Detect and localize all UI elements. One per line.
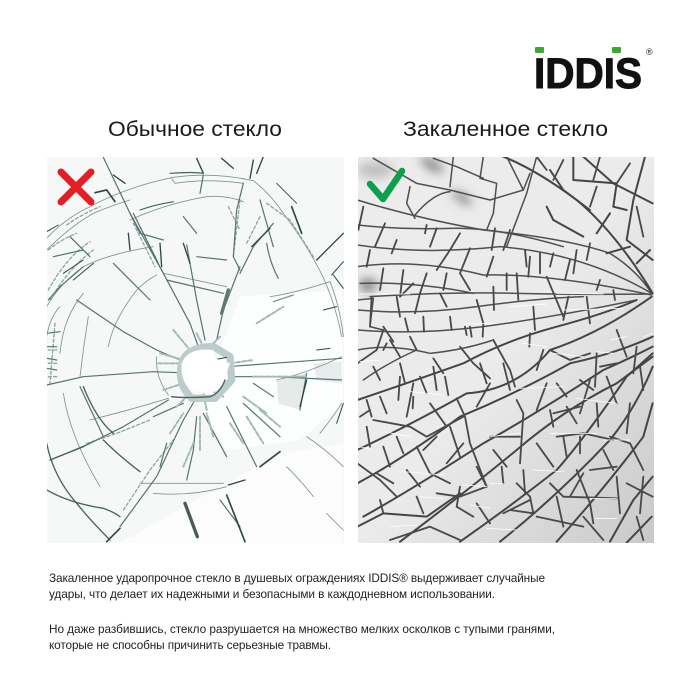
- panel: ordinary broken glass: [47, 157, 344, 543]
- heading: ordinary glass: Обычное стекло: [108, 117, 282, 141]
- concentric cracks: [47, 175, 343, 530]
- icon: red cross: [61, 172, 91, 202]
- dark shards: [47, 157, 343, 542]
- panel: tempered broken glass: [357, 154, 654, 543]
- text block: description: Но даже разбившись, стекло разрушается на множество мелких осколков с тупыми гранями,: [49, 622, 555, 636]
- text block: description: которые не способны причинить серьезные травмы.: [49, 638, 331, 652]
- heading: tempered glass: Закаленное стекло: [403, 117, 608, 141]
- text block: description: Закаленное ударопрочное стекло в душевых ограждениях IDDIS® выдерживает случайные: [49, 571, 545, 585]
- long fan cracks: [357, 157, 652, 380]
- icon: green check mark: [370, 171, 402, 199]
- text block: description: [49, 571, 555, 652]
- glass dust around impact: [158, 307, 307, 467]
- logo: IDDIS: IDDIS: [534, 50, 642, 98]
- radial cracks: [47, 157, 342, 527]
- short cross cracks: [357, 157, 653, 540]
- white glints: [357, 293, 653, 530]
- central impact hole: [181, 349, 230, 392]
- logo: IDDIS: ®: [646, 47, 653, 57]
- text block: description: удары, что делает их надежными и безопасными в каждодневном использовании.: [49, 587, 495, 601]
- fragmented outer band: [48, 200, 313, 510]
